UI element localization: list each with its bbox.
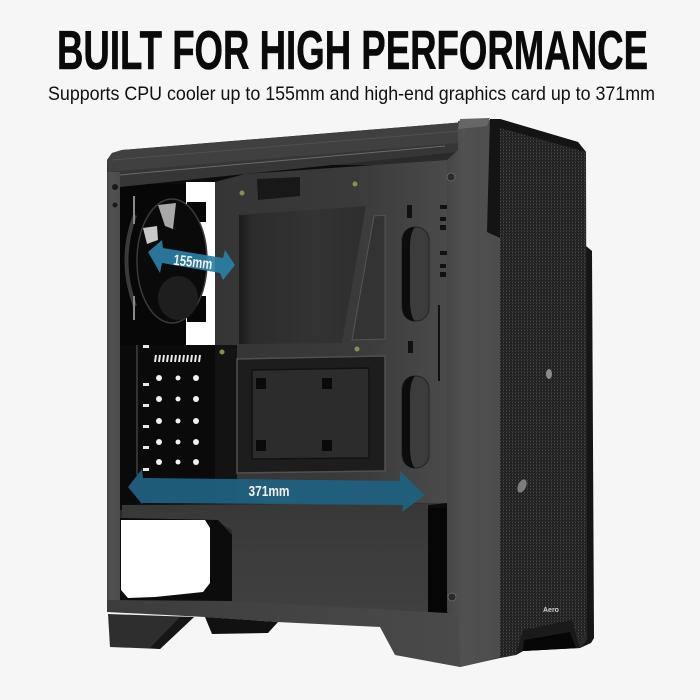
white PSU opening [121,520,210,598]
tray top bracket [257,177,300,200]
white opening behind fan [186,182,215,345]
tray triangular cutout [352,215,385,340]
tray CPU cutout [239,206,366,344]
interior back plate [120,165,450,510]
rear fan [120,184,207,349]
case body silhouette [107,119,587,667]
label: 371mm: 371mm [248,483,290,500]
rear shadow panel of the front [570,240,594,648]
cable routing slot upper [402,227,429,321]
front panel black notch [487,119,586,238]
tray screws [220,182,360,354]
bottom rail [107,600,460,667]
tray slots [407,205,447,381]
PSU surround [120,518,232,601]
front bottom notch [516,620,580,655]
tray lower recess [237,356,385,473]
mesh light spot [546,369,552,379]
arrow: 371mm graphics card clearance [128,469,425,512]
ventilation holes [156,375,199,465]
drive bay dark gap [428,508,447,613]
dark strip below tray [215,345,237,503]
centre foot [205,617,278,634]
left foot [108,614,194,649]
expansion slot tabs [143,345,149,471]
vent slots [155,355,200,362]
AeroCool logo mark: Aero [543,607,559,614]
label: 155mm: 155mm [173,252,213,273]
rear expansion panel [120,345,215,503]
fan grill highlights [158,203,176,229]
side pillar [447,118,500,667]
PSU shroud [120,503,447,613]
subtitle: Supports CPU cooler up to 155mm and high-end graphics card up to 371mm [48,83,655,105]
motherboard tray [215,160,447,503]
cable routing slot lower [402,376,429,468]
front mesh panel [500,128,587,656]
computer case [107,118,594,667]
top rail [107,120,490,189]
left pillar [107,172,120,612]
mesh light spot [515,478,529,494]
arrow: 155mm CPU cooler clearance [148,240,235,280]
